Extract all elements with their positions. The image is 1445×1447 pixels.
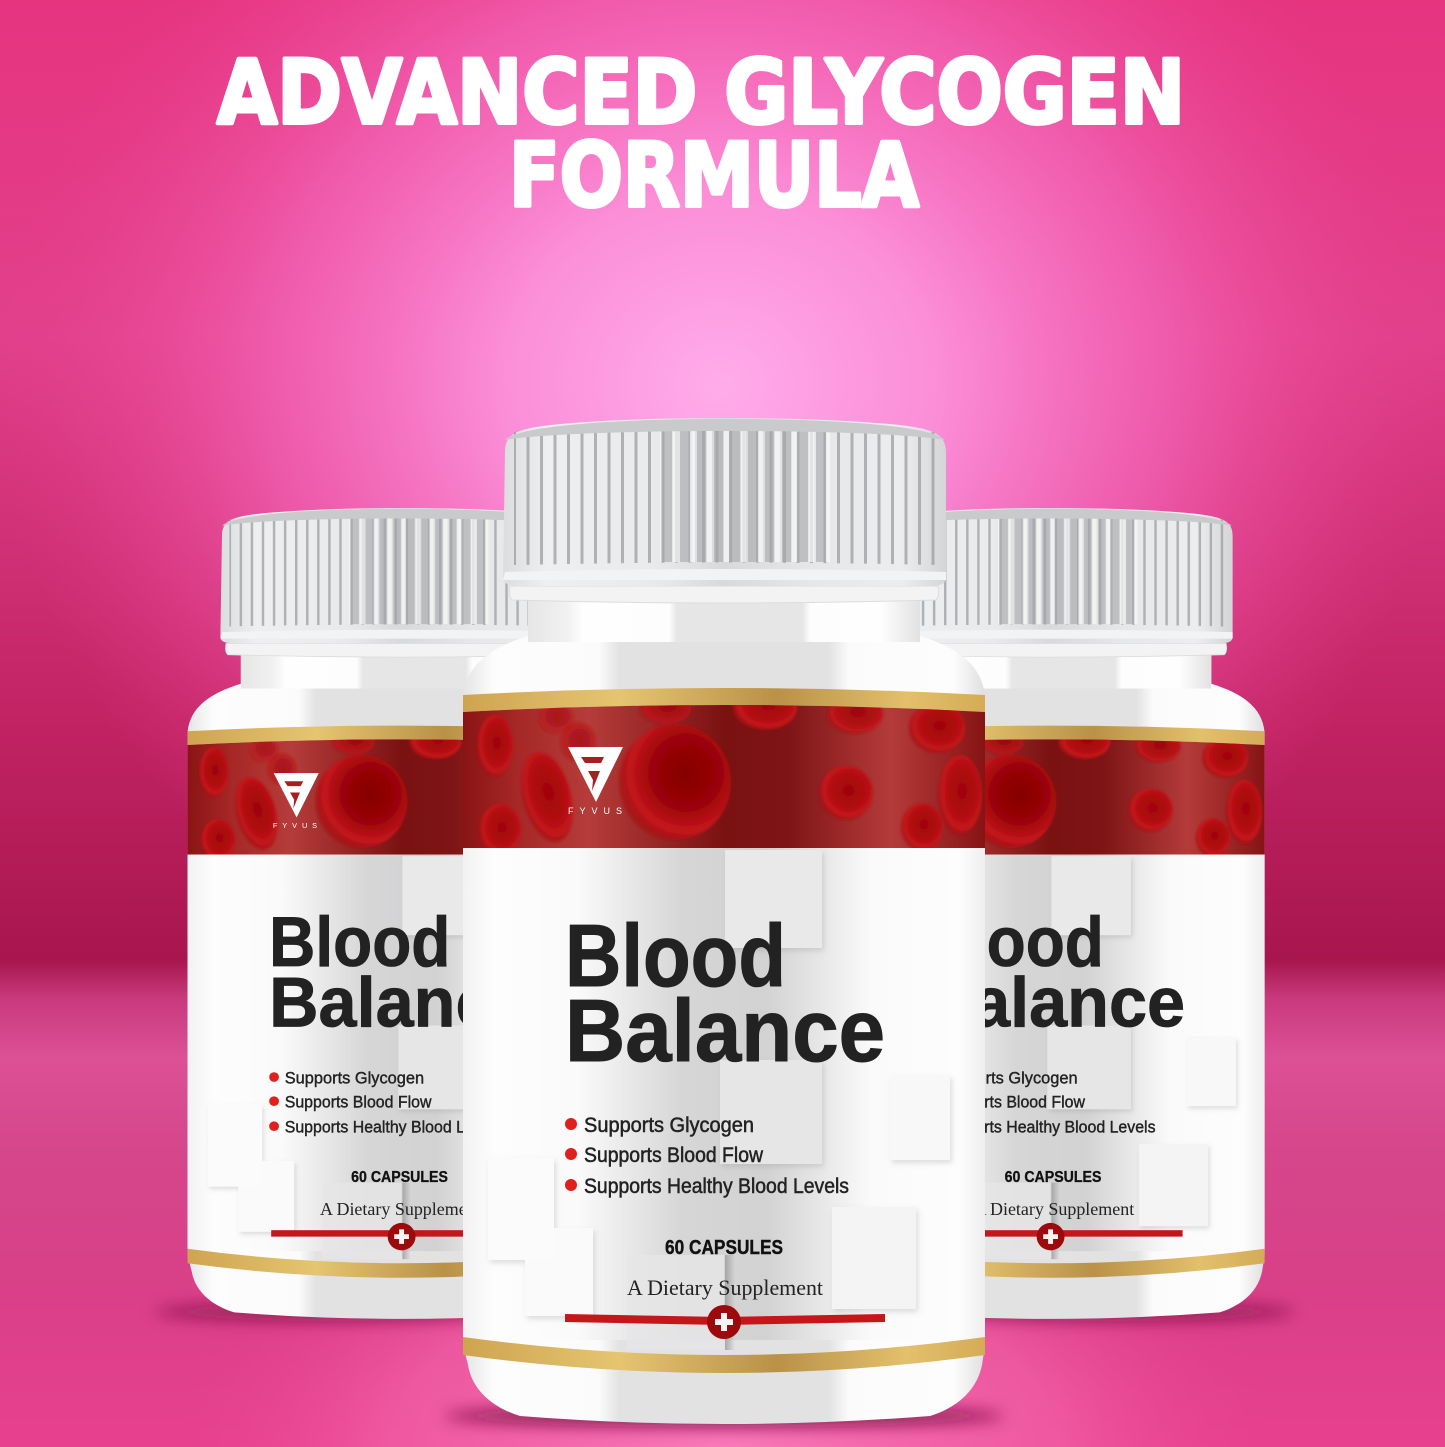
left bottle: Balance	[269, 963, 532, 1042]
benefit bullets: Supports Healthy Blood Levels	[584, 1175, 849, 1198]
left bottle: Supports Glycogen	[285, 1069, 424, 1087]
title: ADVANCED GLYCOGEN	[217, 41, 1185, 144]
right bottle	[837, 508, 1265, 1319]
center bottle shadow	[444, 1405, 1004, 1427]
left bottle: Supports Blood Flow	[285, 1093, 432, 1112]
left bottle: Supports Healthy Blood Levels	[285, 1118, 502, 1137]
brand logo	[568, 747, 628, 816]
product name	[565, 906, 885, 1080]
left bottle shadow	[155, 1303, 505, 1321]
product name: Balance	[565, 981, 885, 1080]
benefit bullets: Supports Blood Flow	[584, 1144, 764, 1167]
supplement line: A Dietary Supplement	[627, 1275, 823, 1300]
right bottle shadow	[945, 1303, 1295, 1321]
left bottle: A Dietary Supplement	[320, 1199, 481, 1219]
background wall	[0, 0, 1445, 962]
center bottle	[463, 418, 985, 1424]
right bottle: Supports Blood Flow	[938, 1093, 1086, 1112]
left bottle: Blood	[269, 902, 450, 982]
left bottle: 60 CAPSULES	[351, 1168, 448, 1186]
right bottle: Supports Healthy Blood Levels	[938, 1118, 1156, 1137]
right bottle: 60 CAPSULES	[1005, 1168, 1102, 1186]
title	[217, 41, 1185, 227]
divider with medical cross icon	[565, 1305, 885, 1339]
left bottle	[188, 508, 616, 1319]
title: FORMULA	[509, 124, 919, 227]
left bottle: FYVUS	[273, 821, 322, 830]
right bottle: Balance	[923, 963, 1185, 1042]
right bottle: Supports Glycogen	[938, 1069, 1078, 1087]
benefit bullets: Supports Glycogen	[584, 1114, 754, 1137]
right bottle: Blood	[923, 902, 1104, 982]
capsule count: 60 CAPSULES	[665, 1237, 783, 1259]
product name: Blood	[565, 906, 786, 1005]
brand logo: FYVUS	[568, 806, 628, 816]
floor	[0, 960, 1445, 1447]
benefit bullets	[565, 1114, 849, 1198]
right bottle: A Dietary Supplement	[973, 1199, 1134, 1219]
